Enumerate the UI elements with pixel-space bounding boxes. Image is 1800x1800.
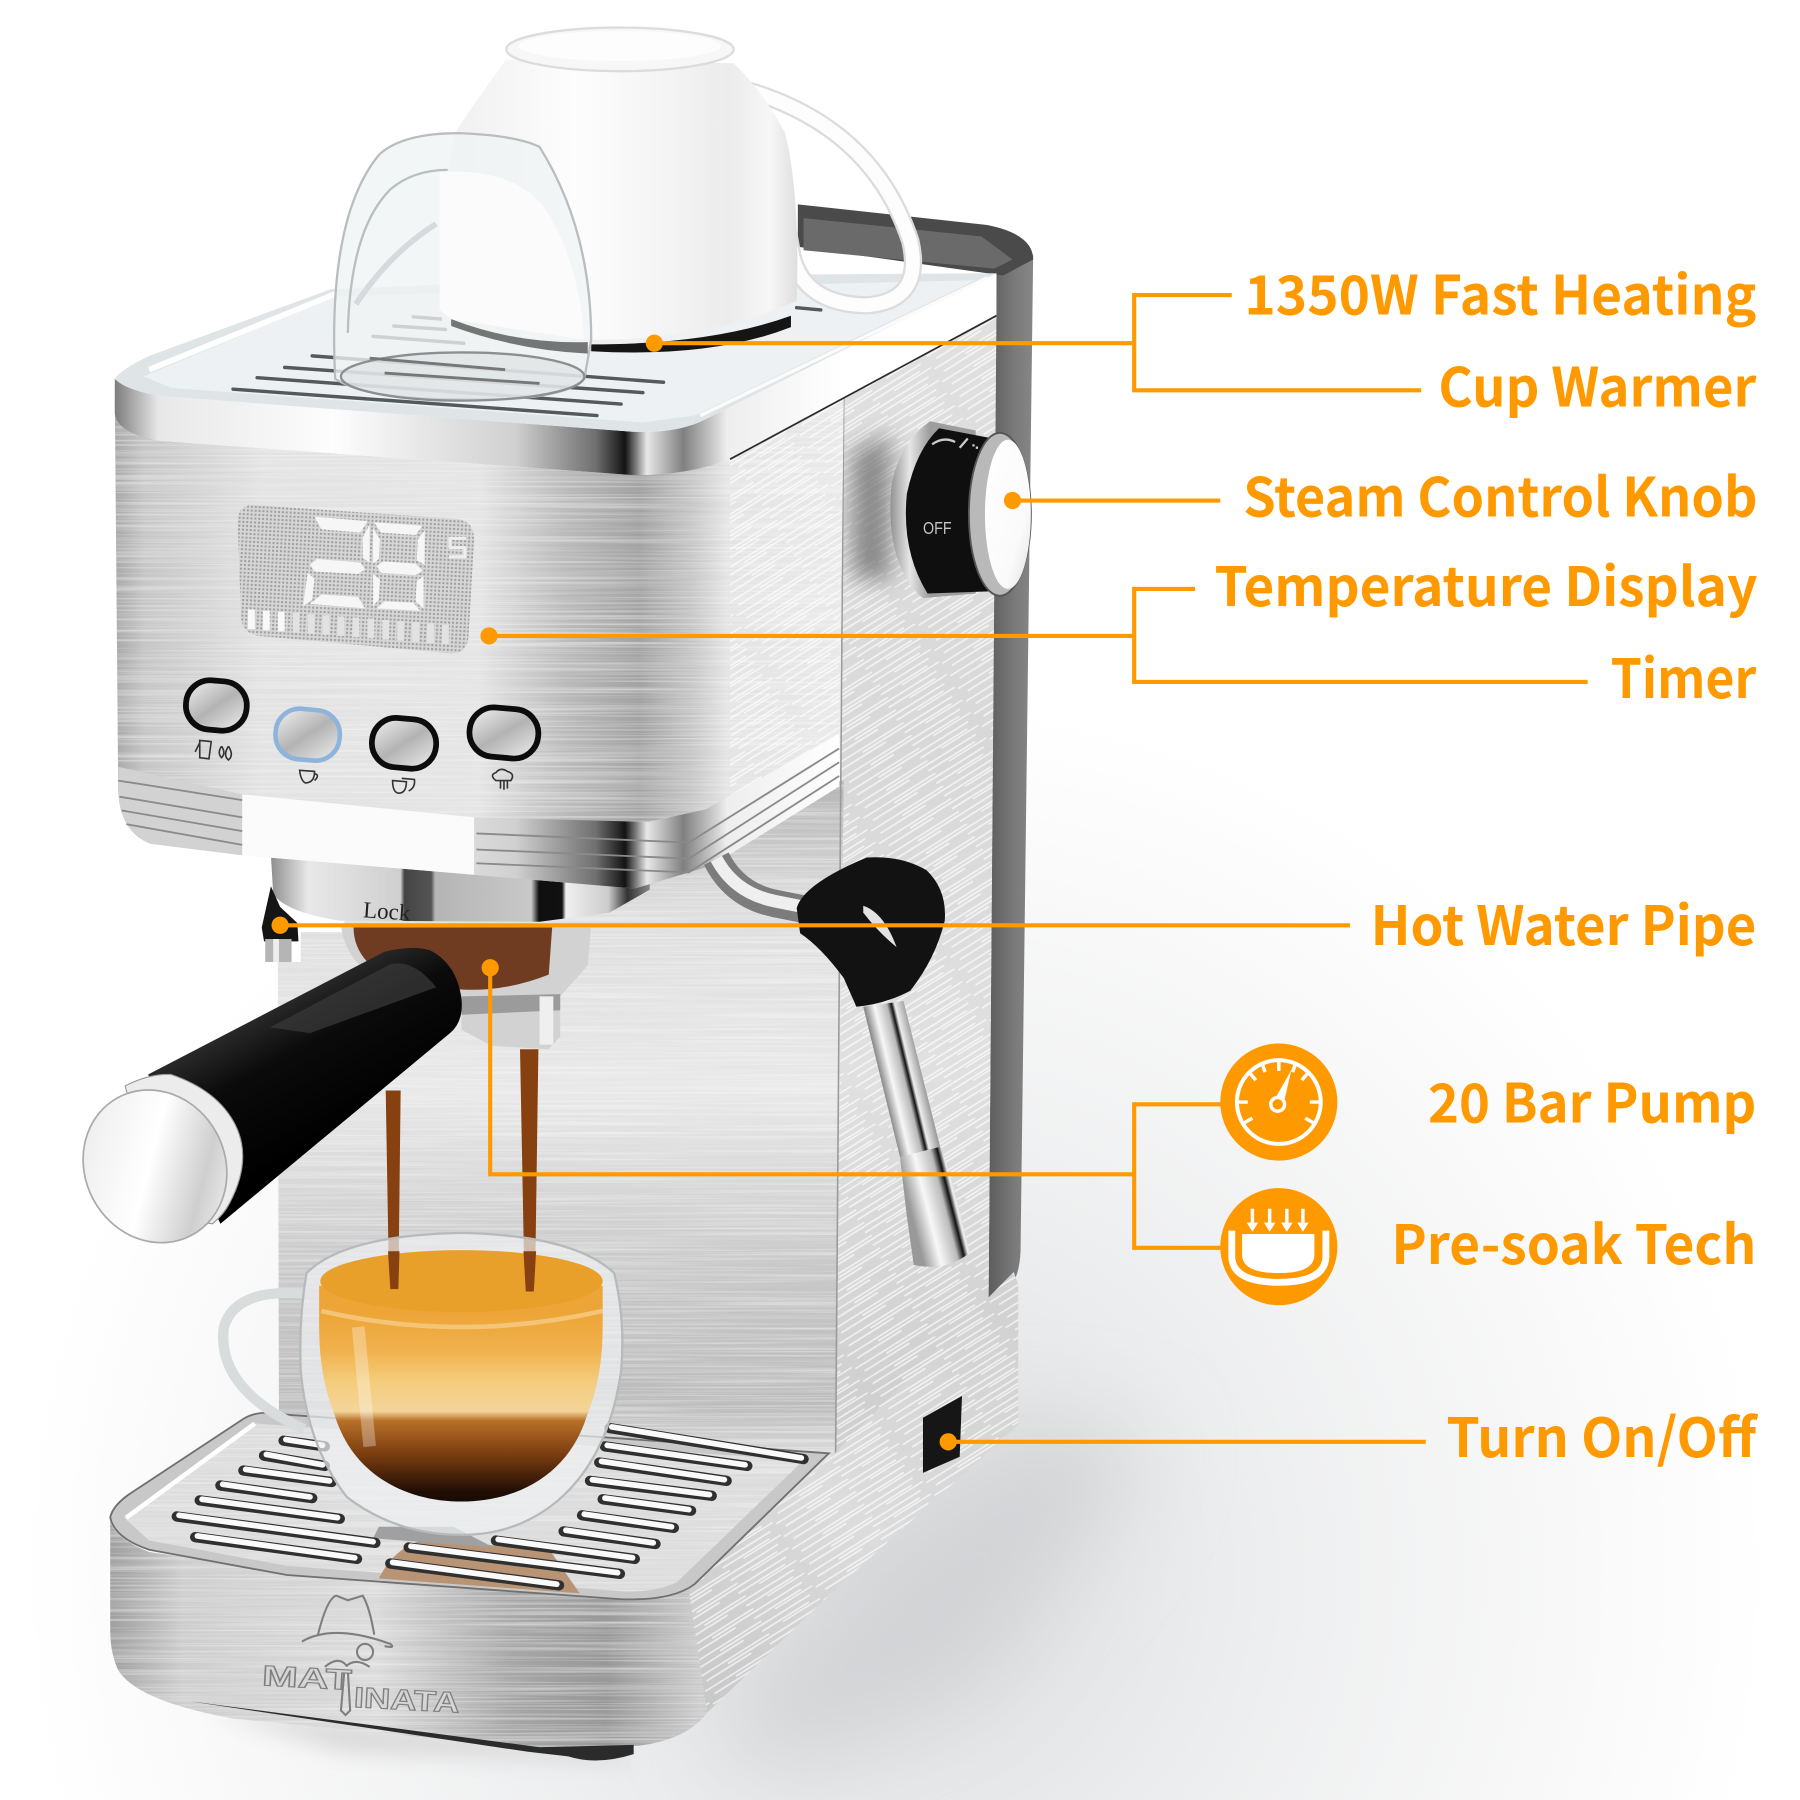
tray slots bbox=[177, 1428, 804, 1585]
label: Hot Water Pipe: Hot Water Pipe bbox=[1371, 882, 1756, 961]
button: water bbox=[184, 678, 249, 760]
head front bbox=[115, 396, 844, 889]
temperature display panel bbox=[238, 505, 474, 653]
icon: pressure gauge bbox=[1220, 1043, 1337, 1161]
steam control knob bbox=[890, 421, 1031, 598]
knob collar bbox=[890, 421, 976, 598]
timer bars bbox=[248, 610, 285, 631]
label: Timer: Timer bbox=[1611, 635, 1757, 714]
background bbox=[213, 945, 1536, 1800]
marker bbox=[1004, 492, 1021, 509]
mug handle bbox=[745, 90, 913, 305]
label: Cup Warmer: Cup Warmer bbox=[1438, 343, 1757, 422]
side panel bbox=[730, 316, 996, 1456]
display digits bbox=[303, 517, 425, 611]
brew group bbox=[271, 855, 650, 926]
portafilter handle bbox=[56, 948, 462, 1268]
marker bbox=[646, 335, 663, 352]
knob shadow bbox=[852, 434, 891, 580]
callout: power switch bbox=[940, 1433, 1426, 1450]
lower ridges bbox=[118, 734, 839, 889]
rear panel bbox=[278, 781, 844, 1456]
handle collar bbox=[125, 1074, 243, 1224]
head side facet bbox=[730, 396, 844, 797]
label: Pre-soak Tech: Pre-soak Tech bbox=[1391, 1201, 1756, 1280]
label: 20 Bar Pump: 20 Bar Pump bbox=[1428, 1060, 1756, 1139]
logo: MATTINATA bbox=[261, 1596, 460, 1720]
marker bbox=[271, 917, 289, 934]
knob label: OFF bbox=[923, 518, 952, 538]
label: 1350W Fast Heating: 1350W Fast Heating bbox=[1244, 252, 1756, 331]
marker bbox=[940, 1433, 957, 1450]
hot water pipe nozzle bbox=[262, 886, 298, 962]
callout: hot water pipe bbox=[271, 917, 1350, 934]
callout: steam knob bbox=[1004, 492, 1220, 509]
glass cup bbox=[334, 133, 591, 401]
label: Temperature Display: Temperature Display bbox=[1215, 543, 1758, 622]
seam bbox=[835, 396, 844, 1590]
icon: pre-soak basket bbox=[1220, 1188, 1337, 1305]
base side bbox=[635, 1272, 1018, 1746]
seconds unit bbox=[449, 538, 466, 557]
callout: cup warmer and fast heating bbox=[646, 295, 1421, 390]
portafilter basket bbox=[341, 924, 591, 1049]
espresso machine bbox=[56, 28, 1033, 1760]
top plate bbox=[115, 273, 996, 432]
head unit bbox=[115, 273, 996, 889]
callout: pump and pre-soak bbox=[482, 959, 1221, 1248]
lock label: Lock bbox=[362, 897, 412, 926]
knob band bbox=[906, 428, 993, 593]
callout: display and timer bbox=[480, 589, 1588, 682]
base front bbox=[110, 1521, 707, 1748]
button: steam bbox=[467, 705, 540, 790]
drip tray bbox=[110, 1413, 829, 1599]
logo: MATTINATA: MAT bbox=[261, 1660, 353, 1697]
white mug bbox=[442, 28, 913, 353]
marker bbox=[480, 627, 498, 645]
logo: MATTINATA: INATA bbox=[353, 1682, 460, 1720]
mug shadow bbox=[591, 316, 791, 353]
label: Steam Control Knob: Steam Control Knob bbox=[1243, 454, 1758, 533]
feet bbox=[189, 1701, 634, 1760]
button: double cup bbox=[370, 716, 438, 793]
coffee streams bbox=[386, 1049, 538, 1291]
base bbox=[110, 1272, 1018, 1760]
label: Turn On/Off: Turn On/Off bbox=[1446, 1394, 1759, 1473]
chrome band bbox=[115, 273, 996, 475]
plate slots bbox=[233, 308, 821, 416]
espresso cup bbox=[223, 1233, 622, 1535]
steam wand bbox=[716, 857, 970, 1267]
button: single cup bbox=[273, 707, 342, 783]
marker bbox=[482, 959, 499, 976]
power switch bbox=[923, 1396, 962, 1473]
water tank bbox=[798, 204, 1033, 1322]
